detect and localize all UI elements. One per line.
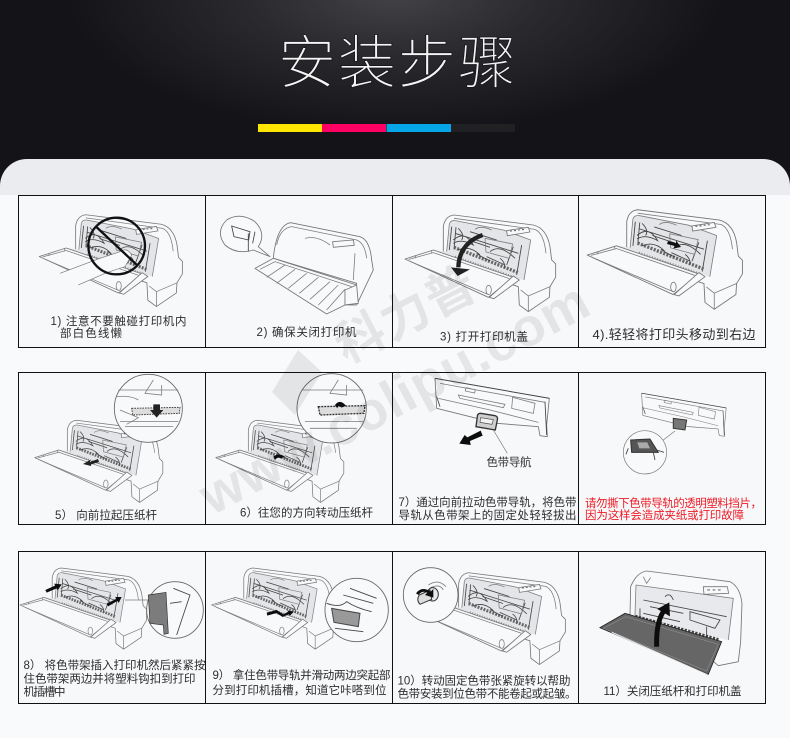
- title: 安装步骤: [278, 31, 516, 96]
- watermark url: www.colipu.com: [189, 271, 599, 527]
- watermark logo: [272, 350, 322, 415]
- step 4 panel: [578, 196, 766, 348]
- caption 10: [398, 674, 576, 700]
- ribbon cartridge: [435, 378, 549, 453]
- caption 3: 3) 打开打印机盖: [440, 330, 528, 344]
- row 2: [18, 372, 766, 524]
- warning panel: [578, 372, 766, 524]
- caption 11: 11）关闭压纸杆和打印机盖: [604, 684, 742, 698]
- row 1: [18, 196, 766, 348]
- caption 8: [24, 658, 206, 698]
- magnifier 9: [267, 578, 388, 642]
- arrow: curved down: [451, 235, 483, 276]
- caption 8: 住色带架两边并将塑料钩扣到打印: [24, 672, 196, 686]
- table grid lines: [18, 196, 766, 704]
- step 1 panel: [18, 196, 206, 348]
- caption 9: 分到打印机插槽，知道它咔嗒到位: [212, 683, 386, 697]
- arrow: right: [667, 240, 681, 248]
- step 2 panel: [206, 196, 392, 348]
- warning text: [585, 496, 762, 522]
- caption 1: 1) 注意不要触碰打印机内: [50, 314, 186, 328]
- step 8 panel: [18, 552, 206, 704]
- magnifier 5: [114, 374, 182, 442]
- caption 8: 机插槽中: [24, 684, 66, 698]
- watermark: [189, 258, 599, 527]
- caption 10: 色带安装到位色带不能卷起或起皱。: [398, 686, 576, 700]
- step 6 panel: [206, 372, 392, 524]
- colour bar: [258, 124, 515, 132]
- icon: printer closing: [600, 571, 742, 674]
- caption 7: 7）通过向前拉动色带导轨，将色带: [398, 495, 576, 509]
- label: ribbon guide: 色带导航: [486, 455, 532, 469]
- caption 5: 5） 向前拉起压纸杆: [55, 508, 158, 522]
- arrow: forward: [83, 459, 99, 466]
- caption 8: 8） 将色带架插入打印机然后紧紧按: [24, 658, 206, 672]
- icon: prohibited sign over hand: [60, 218, 145, 285]
- warning text: 因为这样会造成夹纸或打印故障: [585, 508, 744, 522]
- caption 7: 导轨从色带架上的固定处轻轻拔出: [398, 508, 576, 522]
- magnifier 8: [45, 582, 203, 638]
- steps table: [18, 196, 766, 704]
- caption 4: 4).轻轻将打印头移动到右边: [592, 327, 756, 342]
- step 7 panel: [392, 372, 578, 524]
- step 10 panel: [392, 552, 578, 704]
- watermark name: 科力普: [326, 258, 485, 374]
- step 9 panel: [206, 552, 392, 704]
- magnifier 10: [403, 568, 458, 622]
- magnifier 6: [273, 374, 366, 460]
- warning text: 请勿撕下色带导轨的透明塑料挡片，: [585, 496, 762, 510]
- step 11 panel: [578, 552, 766, 704]
- step 5 panel: [18, 372, 206, 524]
- header band: [0, 0, 790, 195]
- row 3: [18, 552, 766, 704]
- caption 10: 10）转动固定色带张紧旋转以帮助: [398, 674, 570, 688]
- caption 7: [398, 495, 576, 522]
- ribbon cartridge with inset: [623, 393, 726, 474]
- icon: closed printer with detail inset: [220, 216, 373, 314]
- caption 1: [50, 314, 186, 340]
- step 3 panel: [392, 196, 578, 348]
- caption 1: 部白色线懒: [60, 326, 122, 340]
- caption 2: 2) 确保关闭打印机: [256, 325, 357, 339]
- caption 9: 9） 拿住色带导轨并滑动两边突起部: [212, 668, 390, 682]
- caption 6: 6）往您的方向转动压纸杆: [240, 506, 374, 520]
- caption 9: [212, 668, 390, 697]
